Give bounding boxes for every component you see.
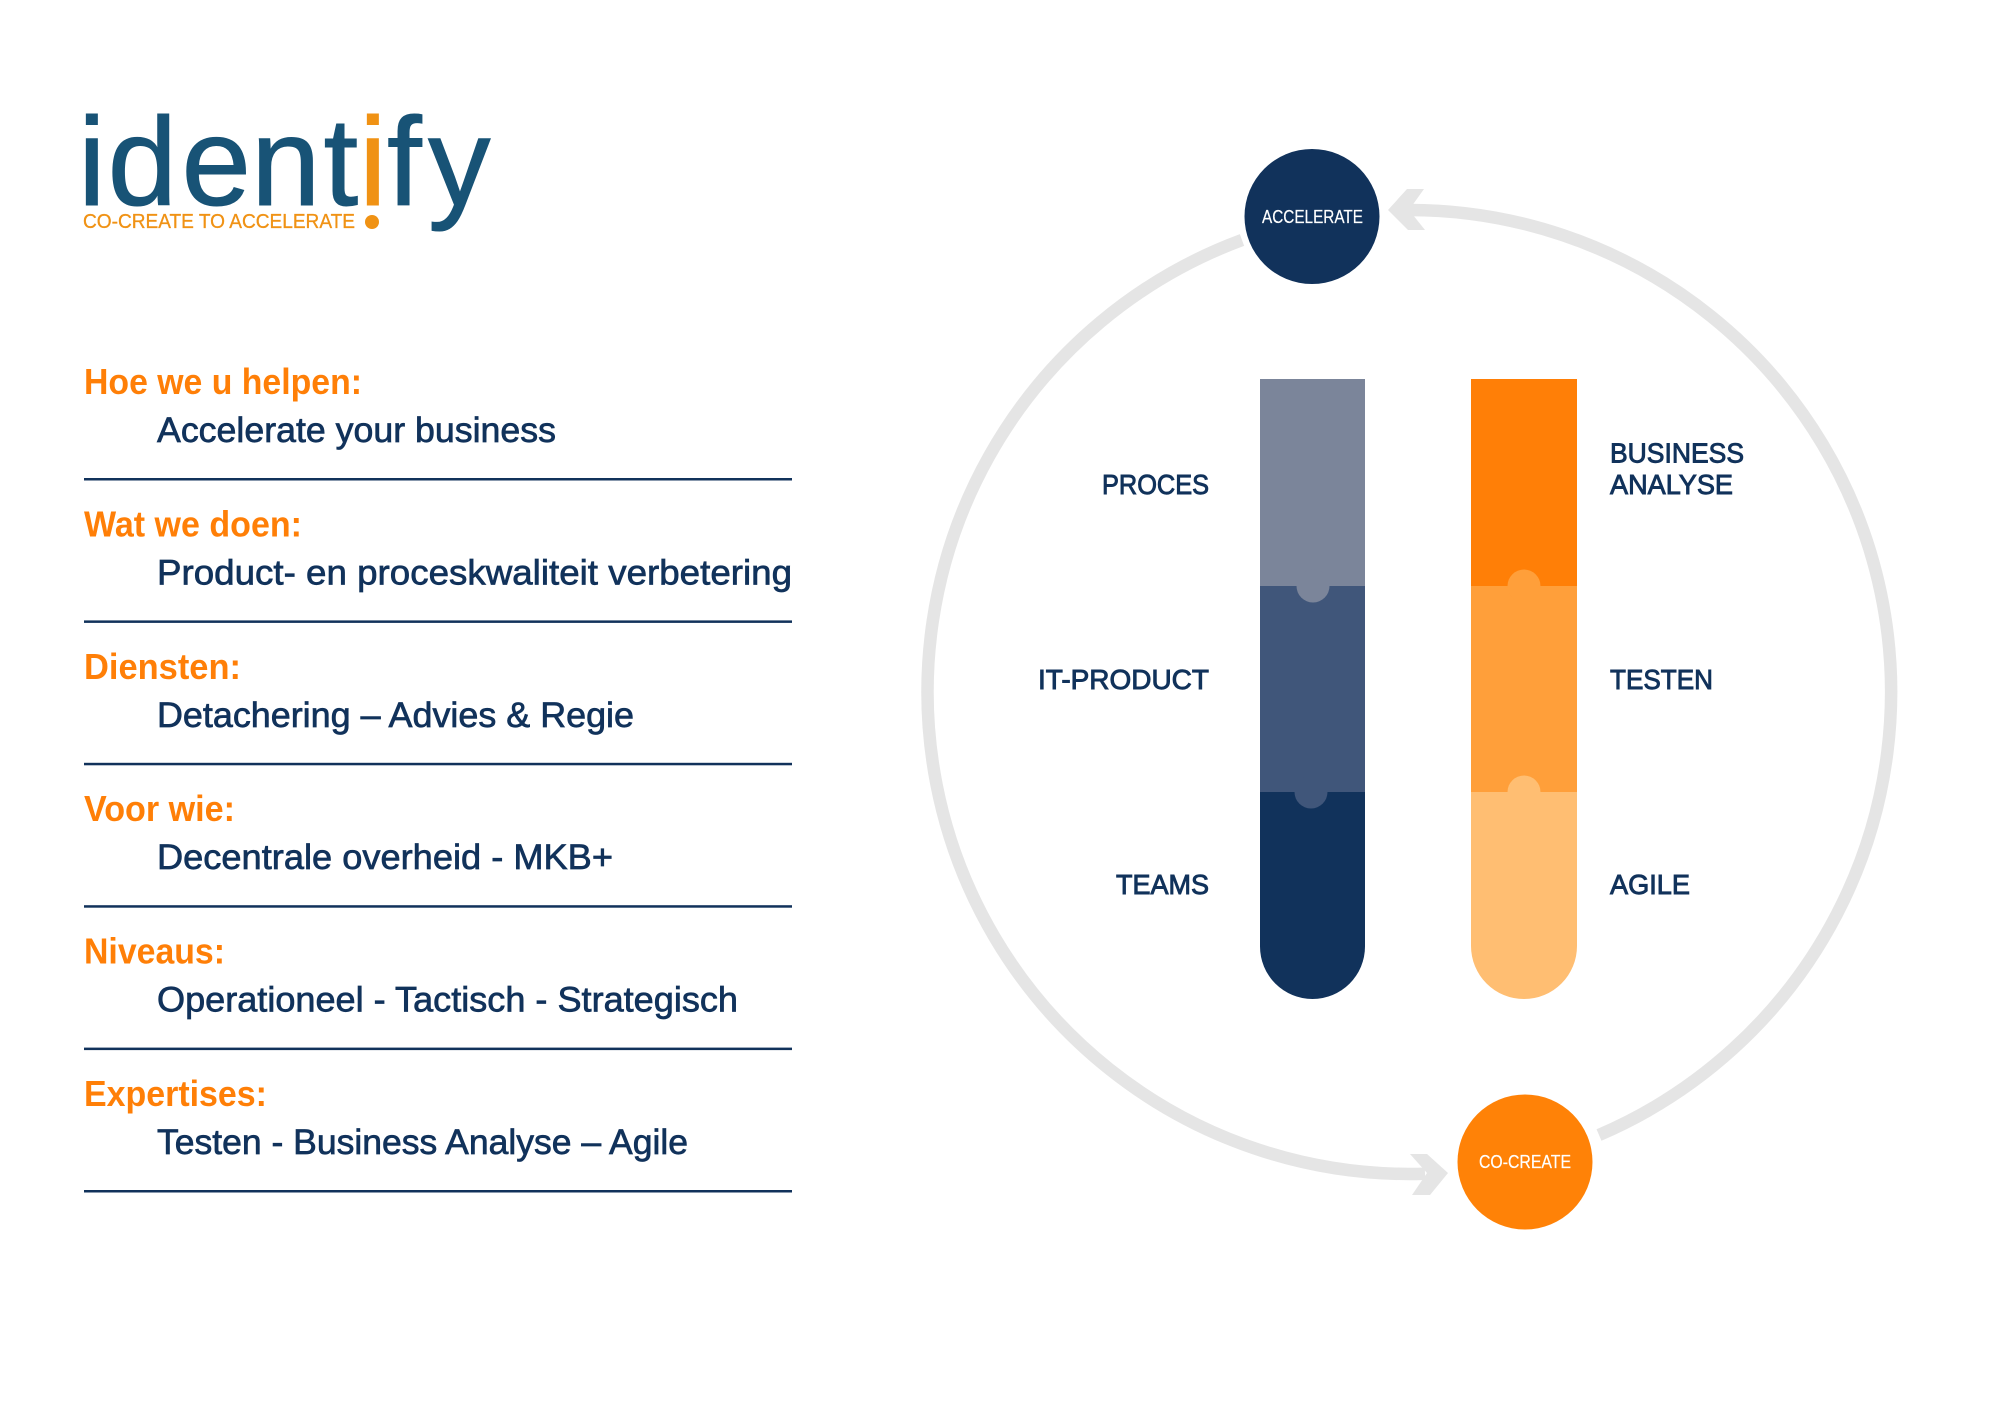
- label: business analyse: [1610, 438, 1744, 500]
- panel: service overview list: [84, 361, 792, 1192]
- navy puzzle column: [1260, 379, 1365, 999]
- cycle ring with arrows: [928, 189, 1891, 1195]
- node: accelerate: ACCELERATE: [1262, 206, 1363, 227]
- row: hoe we u helpen: Accelerate your business: [157, 411, 556, 450]
- label: business analyse: ANALYSE: [1610, 469, 1733, 500]
- row: wat we doen: Product- en proceskwaliteit verbetering: [157, 553, 792, 592]
- label: proces: PROCES: [1102, 469, 1209, 500]
- arrow: accelerate to co-create: [928, 240, 1448, 1195]
- label: testen: TESTEN: [1610, 664, 1713, 695]
- row: expertises: Testen - Business Analyse – Agile: [157, 1123, 688, 1162]
- row: niveaus: [84, 931, 792, 1050]
- row: diensten: Detachering – Advies & Regie: [157, 696, 634, 735]
- label: teams: TEAMS: [1116, 869, 1209, 900]
- arrow: co-create to accelerate: [1388, 189, 1891, 1135]
- label: it-product: IT-PRODUCT: [1038, 664, 1209, 695]
- row: voor wie: Voor wie:: [84, 788, 235, 829]
- row: wat we doen: Wat we doen:: [84, 503, 302, 544]
- logo dot: [365, 215, 379, 229]
- row: wat we doen: [84, 503, 792, 623]
- orange puzzle column: [1471, 379, 1577, 999]
- row: niveaus: Operationeel - Tactisch - Strategisch: [157, 981, 738, 1020]
- node: co-create: [1458, 1094, 1592, 1230]
- row: voor wie: [84, 788, 792, 908]
- row: diensten: Diensten:: [84, 646, 241, 687]
- row: expertises: [84, 1073, 792, 1192]
- node: co-create: CO-CREATE: [1479, 1151, 1571, 1172]
- row: expertises: Expertises:: [84, 1073, 267, 1114]
- row: diensten: [84, 646, 792, 765]
- node: accelerate: [1244, 149, 1380, 284]
- logo tagline: CO-CREATE TO ACCELERATE: [83, 211, 355, 233]
- logo: [78, 93, 491, 233]
- row: voor wie: Decentrale overheid - MKB+: [157, 838, 613, 877]
- label: agile: AGILE: [1610, 869, 1690, 900]
- label: business analyse: BUSINESS: [1610, 438, 1744, 468]
- row: niveaus: Niveaus:: [84, 931, 225, 972]
- logo wordmark: identify: [78, 93, 491, 232]
- row: hoe we u helpen: [84, 361, 792, 480]
- row: hoe we u helpen: Hoe we u helpen:: [84, 361, 362, 402]
